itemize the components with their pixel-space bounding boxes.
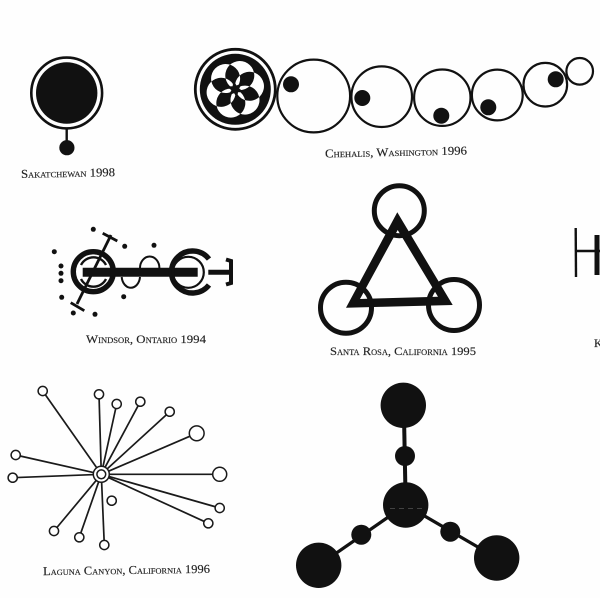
icon: triangle with three circles: [320, 186, 480, 333]
caption: Chehalis: Chehalis, Washington 1996: [325, 144, 467, 160]
panel: Chehalis formation: [195, 49, 593, 160]
icon: radial star of circles: [8, 386, 227, 550]
panel: cropped formation at right edge: [576, 228, 600, 350]
panel: Windsor formation: [52, 227, 231, 346]
caption: Santa Rosa: Santa Rosa, California 1995: [330, 344, 476, 358]
caption: Sakatchewan: Sakatchewan 1998: [21, 165, 115, 181]
caption: Windsor: Windsor, Ontario 1994: [86, 332, 206, 346]
chain of circles with dots: [277, 58, 593, 132]
icon: bar with rings and dots: [52, 227, 231, 317]
panel: Sakatchewan formation: [21, 58, 115, 181]
panel: Santa Rosa formation: [320, 186, 480, 358]
caption: Laguna Canyon: Laguna Canyon, California 1996: [43, 562, 210, 578]
icon: three arms with large and small discs: [296, 383, 519, 588]
icon: flower disc: [195, 49, 275, 129]
icon: partial H glyph: [576, 228, 600, 277]
icon: ringed disc with stem and dot: [31, 58, 102, 155]
panel: three-armed molecule formation: [296, 383, 519, 588]
panel: Laguna Canyon formation: [8, 386, 227, 578]
